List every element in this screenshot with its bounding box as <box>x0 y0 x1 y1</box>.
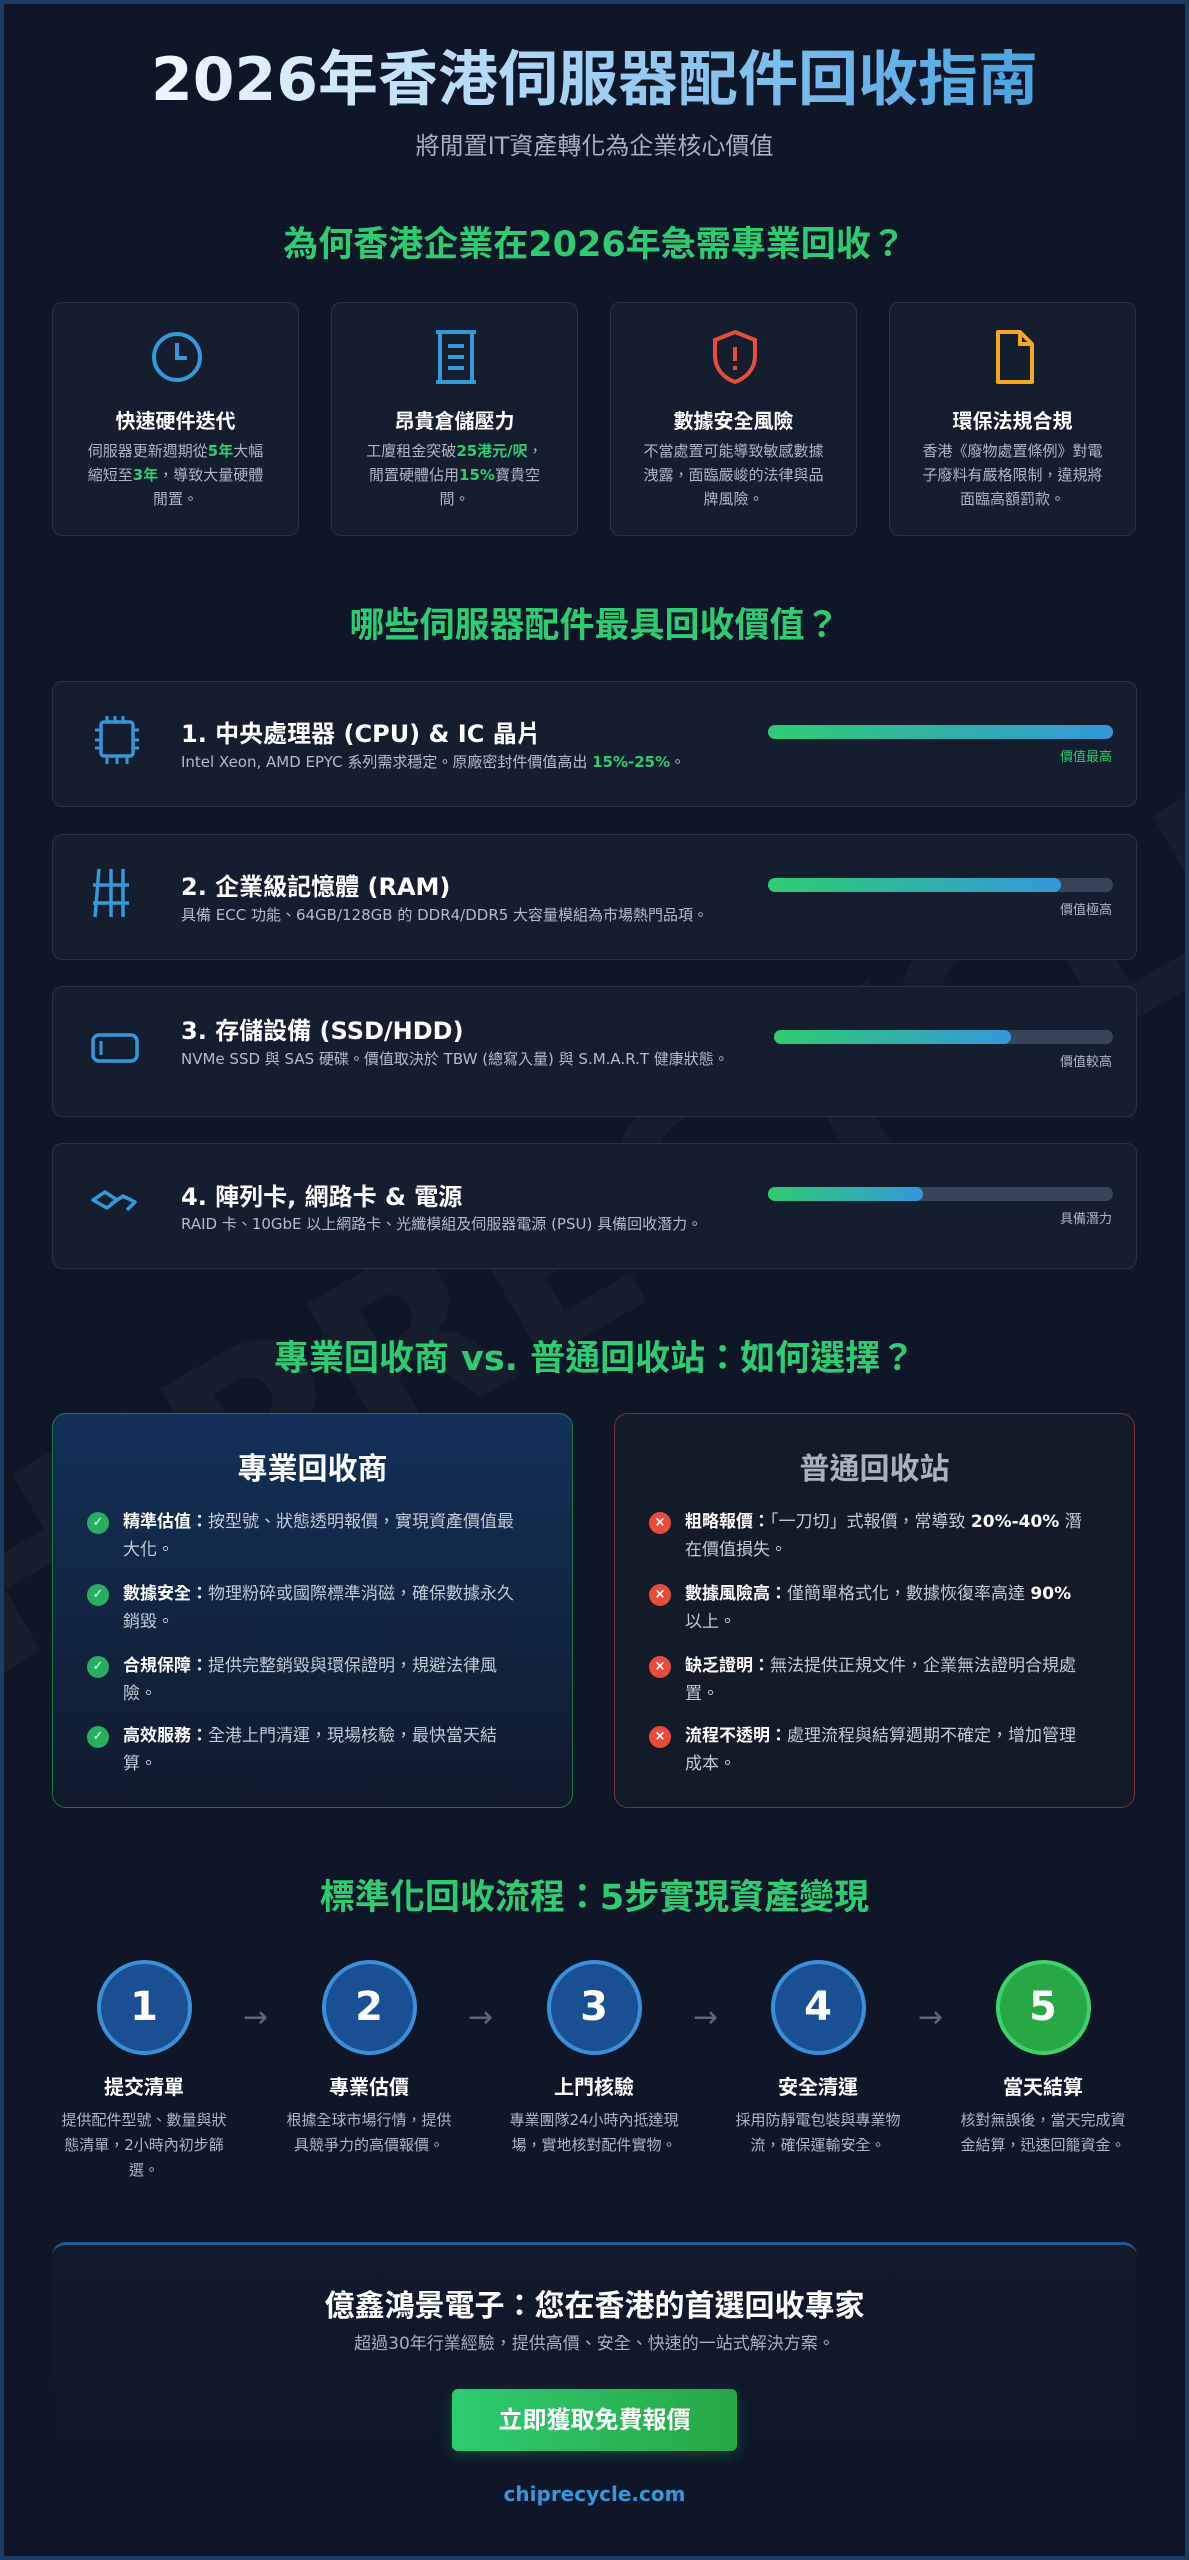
icon: drive <box>91 1033 139 1063</box>
panel: professional: ✓ <box>93 1587 103 1602</box>
row: cards: 具備潛力 <box>1060 1212 1112 1227</box>
website: chiprecycle.com <box>504 2482 685 2506</box>
step 3: 專業團隊24小時內抵達現場，實地核對配件實物。 <box>509 2111 679 2154</box>
step 3: 3 <box>580 1984 608 2030</box>
subtitle: 將閒置IT資產轉化為企業核心價值 <box>416 132 773 160</box>
card: data security: 不當處置可能導致敏感數據洩露，面臨嚴峻的法律與品牌風險。 <box>643 442 824 508</box>
step 1: 提交清單 <box>104 2075 184 2099</box>
item: data: 數據安全：物理粉碎或國際標準消磁，確保數據永久銷毀。 <box>123 1584 514 1632</box>
step 1 <box>61 1960 226 2179</box>
arrow: → <box>243 2000 268 2035</box>
icon: clock <box>152 332 202 382</box>
card: hardware iteration <box>52 302 299 536</box>
step 2 <box>286 1960 452 2154</box>
card: compliance: 環保法規合規 <box>952 409 1072 433</box>
panel: ordinary: 普通回收站 <box>800 1452 950 1487</box>
row: RAM: 2. 企業級記憶體 (RAM) <box>181 873 450 901</box>
item: valuation: 精準估值：按型號、狀態透明報價，實現資產價值最大化。 <box>123 1512 514 1560</box>
panel: professional <box>52 1413 573 1808</box>
icon: shield <box>713 330 757 384</box>
icon: network <box>91 1190 137 1212</box>
item: opaque: 流程不透明：處理流程與結算週期不確定，增加管理成本。 <box>685 1726 1076 1774</box>
panel: ordinary <box>614 1413 1135 1808</box>
step 5: 5 <box>1029 1984 1057 2030</box>
step 4 <box>735 1960 900 2154</box>
step 3: 上門核驗 <box>554 2075 634 2099</box>
arrow: → <box>468 2000 493 2035</box>
icon: ram <box>93 868 129 918</box>
step 3 <box>509 1960 679 2154</box>
icon: server <box>436 330 476 384</box>
card: data security <box>610 302 857 536</box>
row: storage: 價值較高 <box>1060 1055 1112 1070</box>
arrow: → <box>918 2000 943 2035</box>
row: RAM <box>52 834 1137 960</box>
step 5: 核對無誤後，當天完成資金結算，迅速回籠資金。 <box>960 2111 1126 2154</box>
title: 2026年香港伺服器配件回收指南 <box>151 45 1038 115</box>
heading: components: 哪些伺服器配件最具回收價值？ <box>349 606 840 646</box>
step 1: 提供配件型號、數量與狀態清單，2小時內初步篩選。 <box>61 2111 226 2179</box>
card: hardware iteration: 快速硬件迭代 <box>116 409 236 433</box>
row: storage: 3. 存儲設備 (SSD/HDD) <box>181 1017 464 1045</box>
arrow: → <box>693 2000 718 2035</box>
row: RAM: 具備 ECC 功能、64GB/128GB 的 DDR4/DDR5 大容量模組為市場熱門品項。 <box>181 906 708 924</box>
row: cards: RAID 卡、10GbE 以上網路卡、光纖模組及伺服器電源 (PSU) 具備回收潛力。 <box>181 1215 702 1233</box>
row: cards <box>52 1143 1137 1269</box>
card: storage cost: 昂貴倉儲壓力 <box>394 409 514 433</box>
step 4: 安全清運 <box>778 2075 858 2099</box>
item: rough quote: 粗略報價：「一刀切」式報價，常導致 20%-40% 潛在價值損失。 <box>685 1512 1082 1560</box>
button: 立即獲取免費報價 <box>498 2406 690 2434</box>
step 5: 當天結算 <box>1003 2075 1083 2099</box>
step 1: 1 <box>130 1984 158 2030</box>
card: data security: 數據安全風險 <box>674 409 794 433</box>
CTA title: 億鑫鴻景電子：您在香港的首選回收專家 <box>324 2289 864 2324</box>
card: compliance <box>889 302 1136 536</box>
panel: professional: ✓ <box>93 1729 103 1744</box>
icon: document <box>996 330 1034 384</box>
panel: ordinary: × <box>655 1587 665 1602</box>
row: storage: NVMe SSD 與 SAS 硬碟。價值取決於 TBW (總寫入量) 與 S.M.A.R.T 健康狀態。 <box>181 1050 729 1068</box>
row: CPU: 1. 中央處理器 (CPU) & IC 晶片 <box>181 720 541 748</box>
panel: professional: 專業回收商 <box>238 1452 388 1487</box>
icon: chip <box>95 716 139 764</box>
item: service: 高效服務：全港上門清運，現場核驗，最快當天結算。 <box>123 1726 497 1774</box>
step 4: 採用防靜電包裝與專業物流，確保運輸安全。 <box>735 2111 900 2154</box>
row: CPU: 價值最高 <box>1060 750 1112 765</box>
panel: professional: ✓ <box>93 1515 103 1530</box>
button <box>452 2389 737 2451</box>
step 2: 專業估價 <box>329 2075 409 2099</box>
step 4: 4 <box>804 1984 832 2030</box>
heading: process: 標準化回收流程：5步實現資產變現 <box>320 1878 869 1918</box>
heading: why: 為何香港企業在2026年急需專業回收？ <box>283 225 906 265</box>
card: compliance: 香港《廢物處置條例》對電子廢料有嚴格限制，違規將面臨高額罰款。 <box>922 442 1102 508</box>
panel: ordinary: × <box>655 1729 665 1744</box>
heading: comparison: 專業回收商 vs. 普通回收站：如何選擇？ <box>274 1339 915 1379</box>
CTA box <box>52 2242 1137 2492</box>
item: compliance: 合規保障：提供完整銷毀與環保證明，規避法律風險。 <box>123 1656 497 1704</box>
row: CPU: Intel Xeon, AMD EPYC 系列需求穩定。原廠密封件價值高出 15%-25%。 <box>181 753 685 771</box>
row: cards: 4. 陣列卡, 網路卡 & 電源 <box>181 1183 462 1211</box>
CTA subtitle: 超過30年行業經驗，提供高價、安全、快速的一站式解決方案。 <box>354 2334 835 2354</box>
panel: ordinary: × <box>655 1659 665 1674</box>
panel: ordinary: × <box>655 1515 665 1530</box>
item: no proof: 缺乏證明：無法提供正規文件，企業無法證明合規處置。 <box>685 1656 1076 1704</box>
card: storage cost: 工廈租金突破25港元/呎，閒置硬體佔用15%寶貴空間。 <box>366 442 543 508</box>
row: RAM: 價值極高 <box>1060 903 1112 918</box>
card: storage cost <box>331 302 578 536</box>
row: storage <box>52 986 1137 1117</box>
step 5 <box>960 1960 1126 2154</box>
row: CPU <box>52 681 1137 807</box>
step 2: 根據全球市場行情，提供具競爭力的高價報價。 <box>286 2111 452 2154</box>
item: data risk: 數據風險高：僅簡單格式化，數據恢復率高達 90% 以上。 <box>685 1584 1071 1632</box>
card: hardware iteration: 伺服器更新週期從5年大幅縮短至3年，導致大量硬體閒置。 <box>88 442 263 508</box>
panel: professional: ✓ <box>93 1659 103 1674</box>
step 2: 2 <box>355 1984 383 2030</box>
